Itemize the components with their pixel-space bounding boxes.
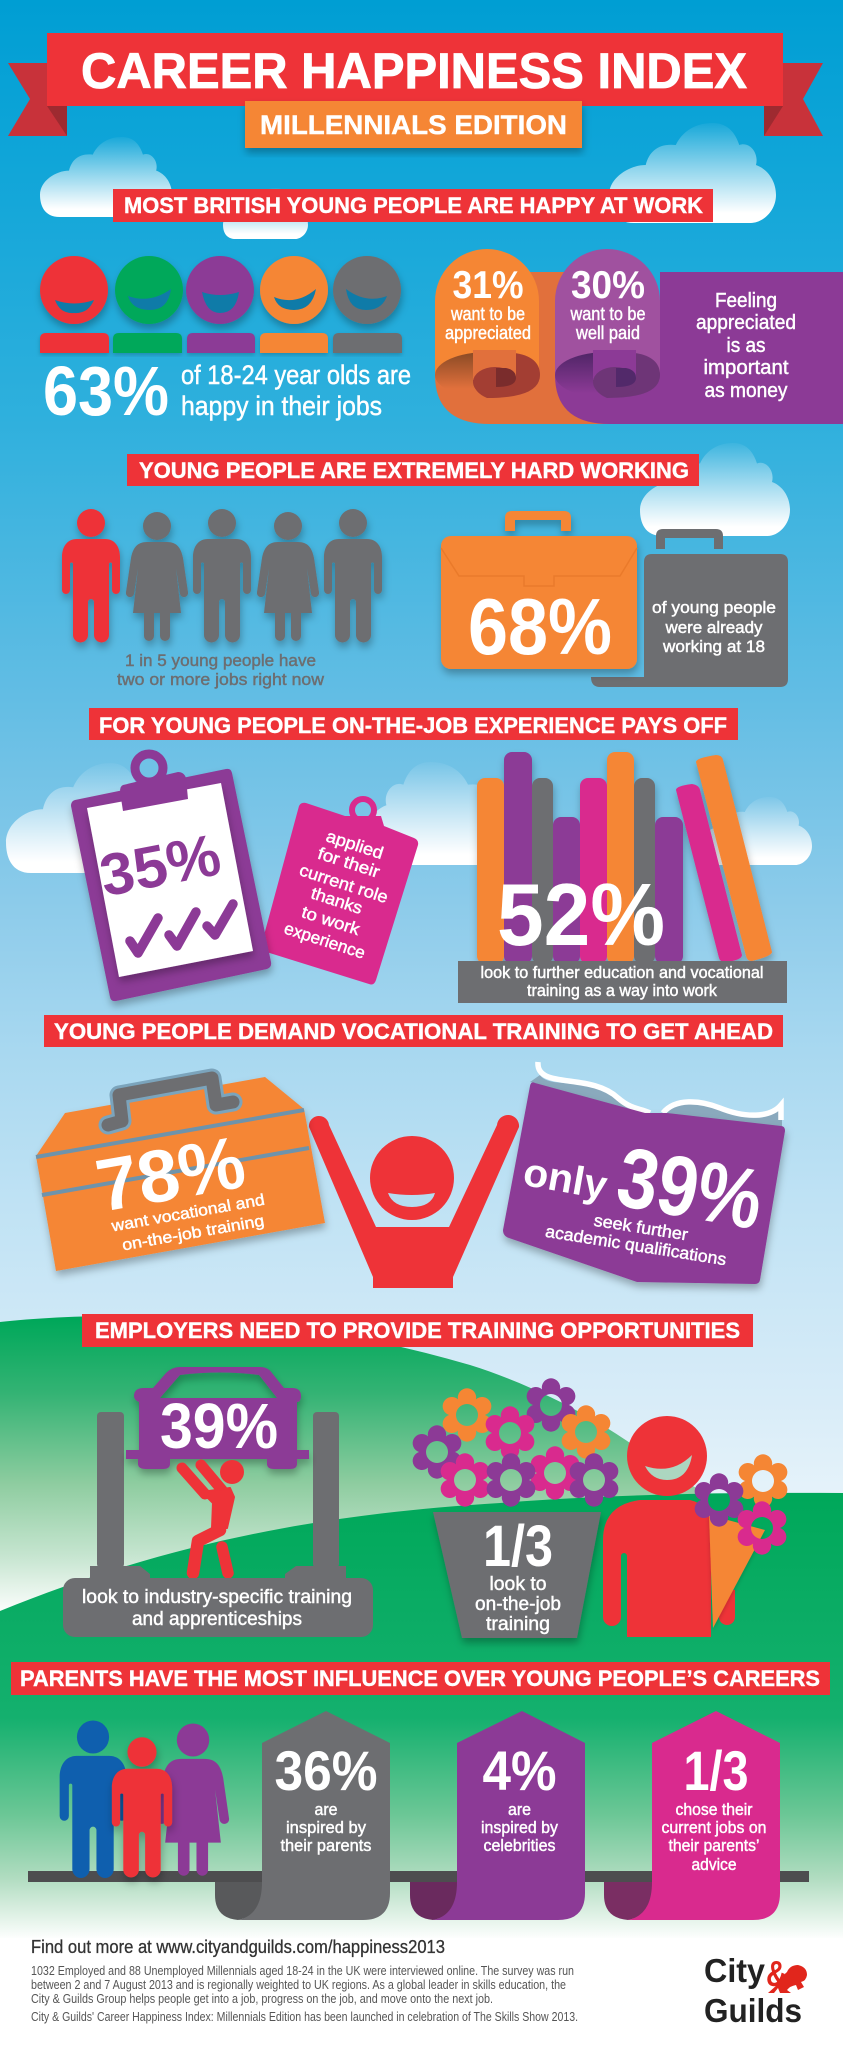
stat: 39%: 39% [610, 1130, 770, 1248]
icon: family [60, 1720, 229, 1878]
section 4 heading: YOUNG PEOPLE DEMAND VOCATIONAL TRAINING TO GET AHEAD [54, 1019, 773, 1044]
panel: flower pot [413, 1378, 618, 1638]
panel: book [503, 1062, 785, 1284]
arrow banner [604, 1711, 780, 1920]
survey notes: City & Guilds' Career Happiness Index: Millennials Edition has been launched in celebration of The Skills Show 2013. [31, 2010, 578, 2024]
icon: check marks [130, 904, 233, 953]
text: feeling appreciated: is as [726, 335, 766, 357]
icon: book stack [477, 752, 772, 964]
icon: open book [503, 1062, 785, 1284]
text: applied for their role: for their [315, 844, 382, 882]
icon: cheering person [309, 1115, 519, 1288]
panel: celebrities stat [410, 1711, 585, 1920]
icon: purple clipboard [71, 754, 271, 1001]
caption: further education [458, 961, 787, 1003]
hills [0, 1316, 843, 1945]
stat: 35%: 35% [94, 821, 226, 909]
section 5 heading: EMPLOYERS NEED TO PROVIDE TRAINING OPPORTUNITIES [95, 1318, 740, 1343]
link line: Find out more at www.cityandguilds.com/happiness2013 [31, 1936, 445, 1957]
icon: pot [433, 1512, 601, 1638]
text: applied for their role: thanks [309, 884, 365, 918]
text: inspired by celebrities: are [508, 1800, 531, 1819]
icon: toolbox [36, 1077, 325, 1271]
icon: people row [62, 509, 382, 642]
stat: 1/3: 1/3 [483, 1514, 553, 1579]
text: 18-24 year olds: of 18-24 year olds are [181, 360, 411, 390]
section 6 heading: PARENTS HAVE THE MOST INFLUENCE OVER YOUNG PEOPLE’S CAREERS [20, 1666, 820, 1691]
text: 18-24 year olds [181, 360, 411, 421]
text: inspired by parents: are [314, 1800, 338, 1819]
panel: clipboards [71, 754, 418, 1001]
icon: lift posts [90, 1412, 346, 1582]
text: applied for their role: to work [299, 902, 363, 939]
text: feeling appreciated: as money [704, 380, 788, 402]
caption: industry-specific training: and apprenticeships [132, 1608, 302, 1630]
panel: car lift [63, 1367, 373, 1637]
edition tag [245, 101, 582, 148]
text: inspired by parents: inspired by [286, 1818, 366, 1837]
panel: parents stat [215, 1711, 390, 1920]
clouds [6, 123, 812, 873]
text: want vocational: want vocational and [109, 1192, 266, 1236]
text: want vocational: on-the-job training [121, 1213, 266, 1254]
title: CAREER HAPPINESS INDEX [81, 43, 747, 99]
text: chose their jobs [662, 1800, 766, 1874]
text: feeling appreciated: appreciated [696, 312, 796, 334]
icon: man lifting [182, 1460, 244, 1573]
stat: 4%: 4% [482, 1739, 556, 1802]
text: applied for their role: applied [324, 827, 386, 863]
icon: lifted car [126, 1367, 309, 1469]
text: applied for their role: experience [282, 919, 368, 963]
text: want to be well paid [570, 304, 646, 343]
panel: five people [62, 509, 382, 689]
panel: toolbox [36, 1077, 325, 1271]
text: want to be appreciated [445, 304, 531, 343]
survey notes [31, 1964, 578, 2024]
text: 1 in 5: 1 in 5 young people have [125, 651, 316, 670]
stat: 68%: 68% [468, 582, 612, 671]
text: seek further: academic qualifications [544, 1222, 728, 1269]
stat: 78%: 78% [90, 1120, 251, 1228]
banner bar [47, 33, 783, 106]
text: 18-24 year olds: happy in their jobs [181, 391, 382, 421]
ground bar [28, 1871, 809, 1882]
arrow banner [215, 1711, 390, 1920]
purple scroll [555, 249, 843, 424]
icon: gray briefcase [591, 529, 788, 687]
stat: 36%: 36% [274, 1739, 378, 1802]
text: inspired by celebrities: celebrities [484, 1836, 556, 1855]
text: on-the-job training: on-the-job [475, 1593, 561, 1615]
text: working at 18: working at 18 [662, 637, 765, 656]
section 2 heading: YOUNG PEOPLE ARE EXTREMELY HARD WORKING [139, 458, 689, 483]
survey notes: City & Guilds Group helps people get into a job, progress on the job, and move onto the next job. [31, 1992, 493, 2006]
title banner [8, 33, 823, 148]
text: on-the-job training: look to [490, 1573, 547, 1595]
logo: City & Guilds: & [766, 1953, 787, 1994]
edition tag: MILLENNIALS EDITION [260, 110, 567, 140]
text: applied for their role [282, 827, 390, 963]
panel: books [458, 752, 787, 1003]
text: chose their jobs: chose their [676, 1800, 753, 1819]
text: want to be appreciated: want to be [450, 304, 525, 324]
panel: happy faces [40, 256, 411, 430]
logo: City & Guilds: City [704, 1952, 766, 1989]
ribbon tails [8, 63, 823, 136]
section 1 heading: MOST BRITISH YOUNG PEOPLE ARE HAPPY AT WORK [124, 193, 703, 218]
icon: flowers [413, 1378, 618, 1507]
text: inspired by celebrities [481, 1800, 558, 1855]
text: want to be well paid: want to be [570, 304, 646, 324]
panel: parents advice stat [604, 1711, 780, 1920]
section 3 heading: FOR YOUNG PEOPLE ON-THE-JOB EXPERIENCE PAYS OFF [99, 713, 727, 738]
logo: City & Guilds: Guilds [704, 1992, 802, 2029]
stat: 1/3: 1/3 [684, 1739, 748, 1802]
caption: further education: look to further education and vocational [480, 964, 764, 982]
footer [31, 1936, 807, 2029]
icon: person with bouquet [603, 1416, 787, 1637]
footer background [0, 1938, 843, 2048]
survey notes: 1032 Employed and 88 Unemployed Millennials aged 18-24 in the UK were interviewed online. The survey was run [31, 1964, 574, 1978]
text: working at 18: were already [665, 618, 763, 637]
stat: 30%: 30% [571, 264, 645, 307]
icon: pink clipboard [260, 799, 418, 984]
text: working at 18 [652, 598, 776, 656]
text: 1 in 5: two or more jobs right now [117, 670, 325, 689]
stat: 52%: 52% [497, 865, 665, 964]
icon: orange briefcase [441, 511, 637, 669]
text: feeling appreciated [696, 290, 796, 402]
text: seek further: seek further [592, 1211, 690, 1244]
text: inspired by parents: their parents [280, 1836, 372, 1855]
logo: City & Guilds [704, 1952, 807, 2029]
text: feeling appreciated: Feeling [715, 290, 777, 312]
text: inspired by parents [280, 1800, 372, 1855]
text: only: only [520, 1150, 611, 1208]
panel: scrolls [435, 249, 843, 424]
stat: 31%: 31% [452, 264, 524, 307]
text: want vocational [109, 1192, 266, 1254]
text: want to be appreciated: appreciated [445, 323, 531, 343]
text: on-the-job training: training [486, 1613, 550, 1635]
text: feeling appreciated: important [704, 357, 789, 379]
text: chose their jobs: their parents’ [668, 1836, 760, 1855]
arrow banner [410, 1711, 585, 1920]
text: working at 18: of young people [652, 598, 776, 617]
text: inspired by celebrities: inspired by [481, 1818, 558, 1837]
caption: further education: training as a way into work [527, 982, 718, 1000]
survey notes: between 2 and 7 August 2013 and is regionally weighted to UK regions. As a global leader in skills education, the [31, 1978, 566, 1992]
icon: five smiling faces [40, 256, 402, 353]
text: 1 in 5 [117, 651, 325, 689]
stat: 63%: 63% [43, 352, 169, 430]
panel: briefcases [441, 511, 788, 687]
stat: 39%: 39% [160, 1390, 278, 1462]
text: on-the-job training [475, 1573, 561, 1635]
text: applied for their role: current role [297, 861, 390, 907]
text: want to be well paid: well paid [575, 323, 640, 343]
caption: industry-specific training [63, 1578, 373, 1637]
caption: industry-specific training: look to industry-specific training [82, 1586, 352, 1608]
text: chose their jobs: advice [692, 1855, 736, 1874]
text: chose their jobs: current jobs on [662, 1818, 766, 1837]
orange scroll [435, 249, 843, 424]
